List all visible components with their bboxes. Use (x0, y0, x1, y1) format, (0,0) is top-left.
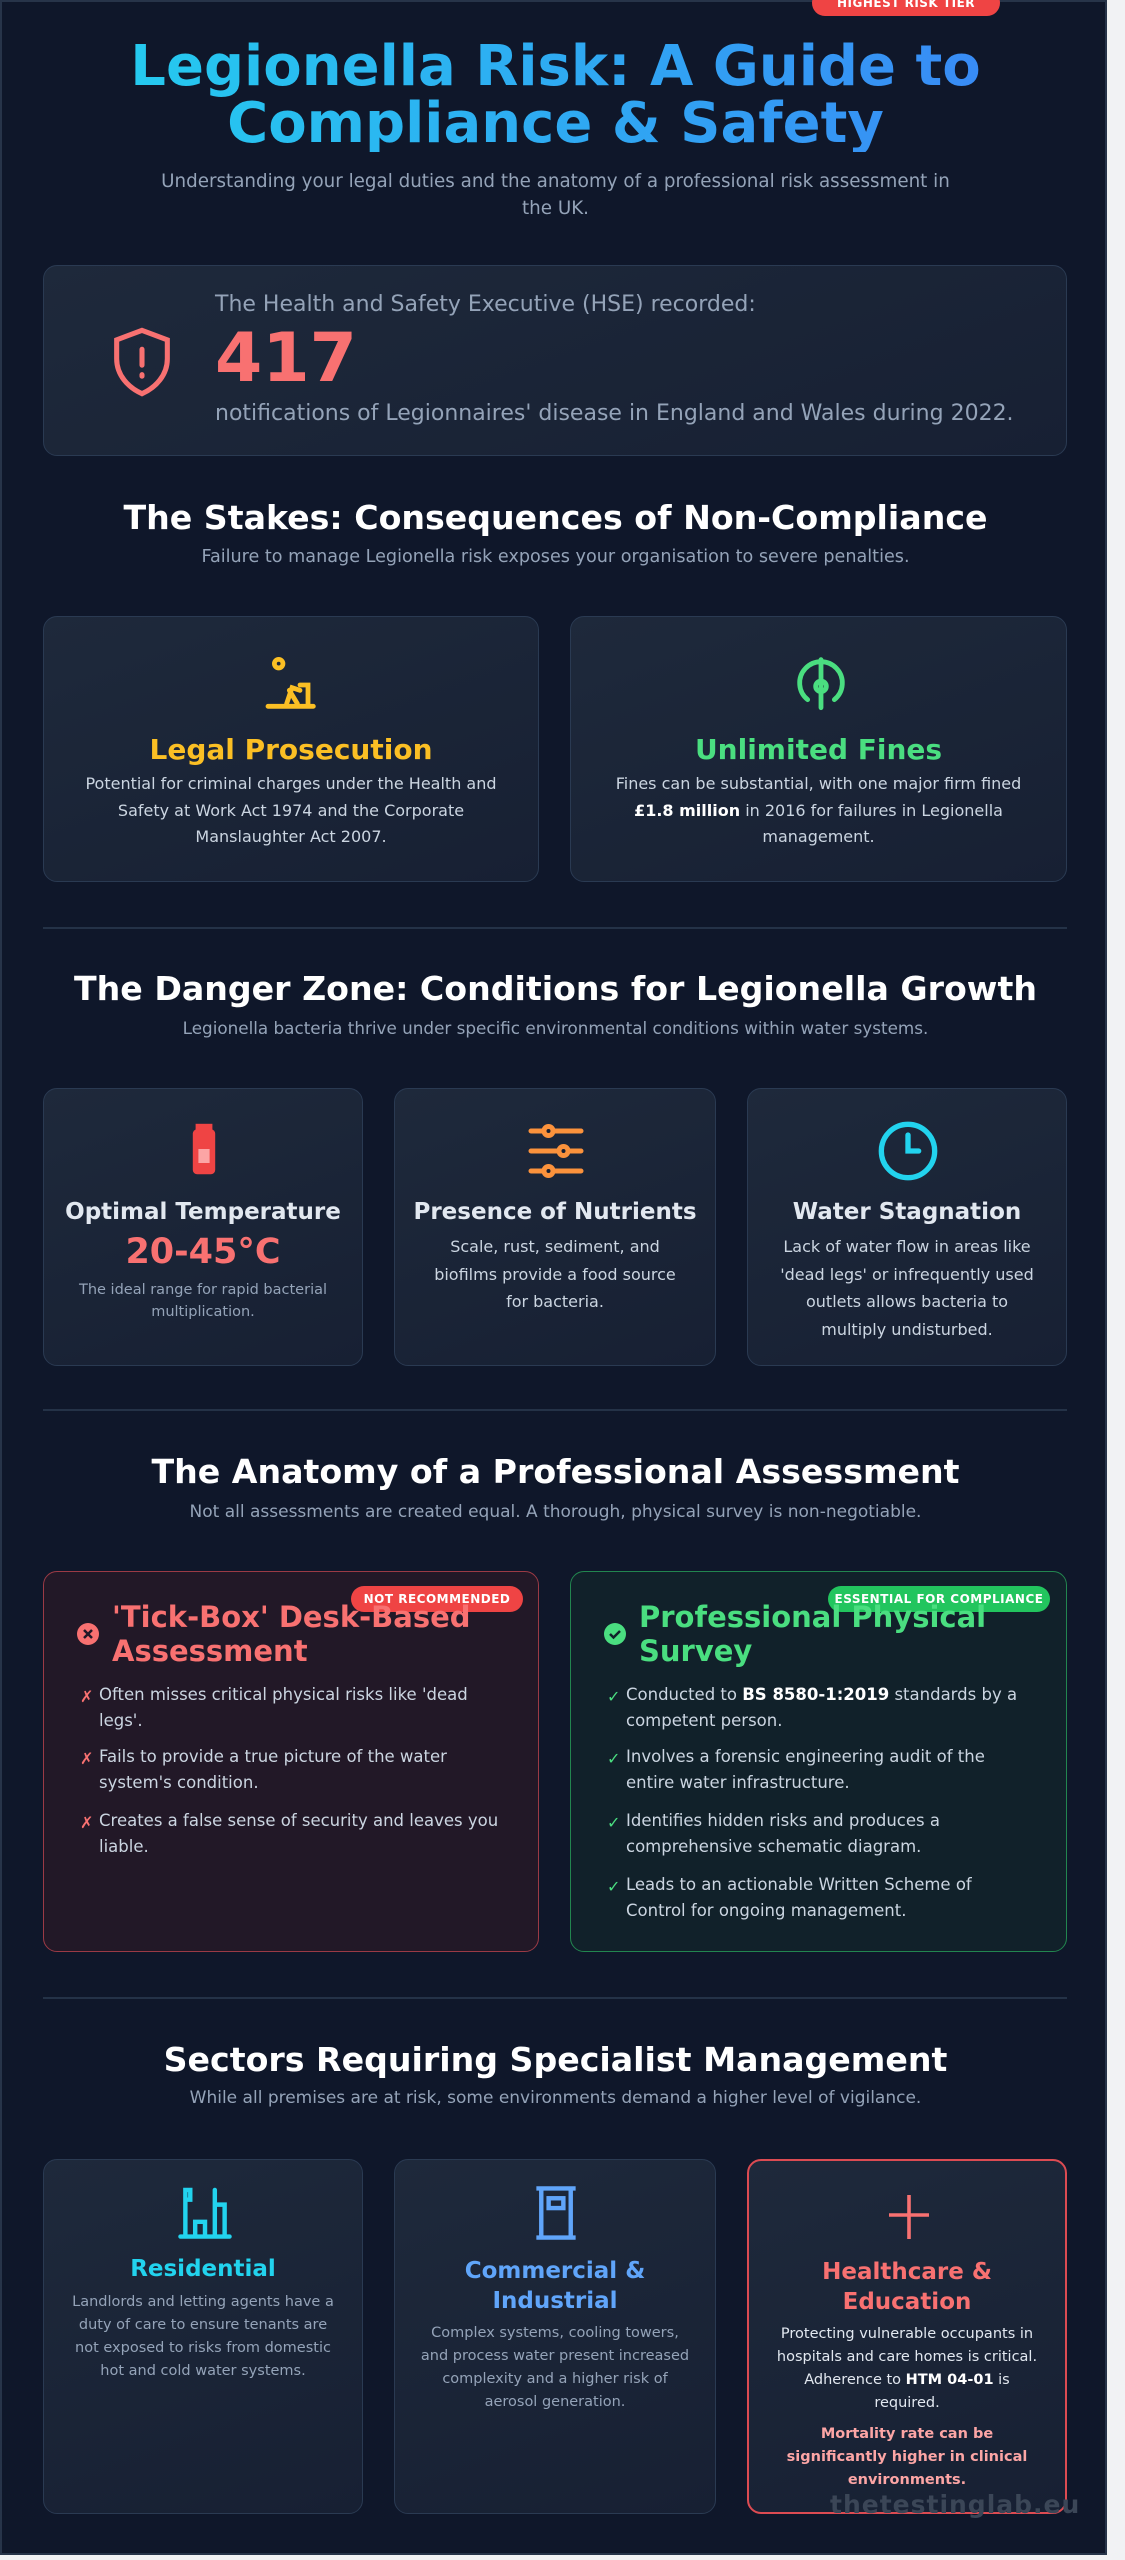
icon: thermometer (192, 1124, 216, 1174)
panel: legal prosecution: Potential for criminal charges under the Health and Safety at Work Act 1974 and the Corporate Manslaughter Act 2007. (85, 774, 497, 846)
panel: healthcare (747, 2159, 1067, 2514)
panel: tick-box: 'Tick-Box' Desk-Based (112, 1600, 471, 1634)
panel: professional survey: ✓ (607, 1687, 620, 1706)
panel: commercial: Complex systems, cooling towers, and process water present increased complexity and a higher risk of aerosol generation. (421, 2325, 689, 2410)
panel: tick-box: ✗ (80, 1749, 93, 1768)
icon: building (536, 2186, 576, 2240)
icon: gavel (266, 657, 316, 709)
heading: anatomy: The Anatomy of a Professional Assessment (151, 1452, 960, 1491)
icon: x circle (77, 1623, 99, 1645)
heading: stakes: The Stakes: Consequences of Non-Compliance (123, 498, 988, 537)
icon: clock (878, 1122, 938, 1180)
panel: temperature: 20-45°C (125, 1232, 281, 1272)
panel: unlimited fines (570, 616, 1067, 882)
badge: highest risk tier (812, 0, 1000, 16)
panel: commercial: Commercial & (465, 2258, 645, 2284)
panel: professional survey: ✓ (607, 1749, 620, 1768)
panel: professional survey: Survey (639, 1634, 752, 1668)
title: Compliance & Safety (227, 91, 884, 156)
panel: tick-box: ✗ (80, 1687, 93, 1706)
panel: residential (43, 2159, 363, 2514)
icon: sliders (528, 1124, 584, 1178)
heading: sectors: Sectors Requiring Specialist Management (164, 2040, 947, 2079)
panel: residential: Residential (130, 2256, 276, 2282)
panel: tick-box: Often misses critical physical risks like 'dead legs'. (99, 1685, 468, 1730)
icon: medical cross (889, 2195, 929, 2239)
stat text: notifications of Legionnaires' disease in England and Wales during 2022. (215, 401, 1014, 426)
panel: residential: Landlords and letting agents have a duty of care to ensure tenants are not exposed to risks from domestic hot and cold water systems. (72, 2294, 334, 2379)
text: Failure to manage Legionella risk exposes your organisation to severe penalties. (201, 547, 910, 567)
panel: professional survey: ✓ (607, 1813, 620, 1832)
badge: essential (828, 1586, 1050, 1612)
panel: commercial (394, 2159, 716, 2514)
panel: tick-box: Creates a false sense of security and leaves you liable. (99, 1811, 498, 1856)
text: While all premises are at risk, some environments demand a higher level of vigilance. (190, 2088, 921, 2108)
panel: nutrients: Scale, rust, sediment, and biofilms provide a food source for bacteria. (434, 1237, 676, 1311)
panel: nutrients: Presence of Nutrients (413, 1199, 697, 1225)
stat text: 417 (215, 319, 357, 398)
panel: legal prosecution (43, 616, 539, 882)
panel: stagnation (747, 1088, 1067, 1366)
panel: professional survey: Professional Physical (639, 1600, 986, 1634)
panel: tick-box: Assessment (112, 1634, 308, 1668)
subtitle: Understanding your legal duties and the anatomy of a professional risk assessment in the UK. (161, 171, 950, 219)
panel: tick-box (43, 1571, 539, 1952)
title: Legionella Risk: A Guide to (130, 34, 981, 99)
panel: healthcare: Mortality rate can be significantly higher in clinical environments. (787, 2426, 1027, 2488)
panel: professional survey: Involves a forensic engineering audit of the entire water infrastructure. (626, 1747, 985, 1792)
icon: coin (797, 657, 845, 710)
stat text: The Health and Safety Executive (HSE) recorded: (215, 292, 756, 317)
panel: tick-box: ✗ (80, 1813, 93, 1832)
panel: temperature: The ideal range for rapid bacterial multiplication. (79, 1282, 327, 1320)
panel: professional survey: Leads to an actionable Written Scheme of Control for ongoing management. (626, 1875, 972, 1920)
icon: buildings (178, 2188, 232, 2239)
panel: professional survey: Identifies hidden risks and produces a comprehensive schematic diagram. (626, 1811, 940, 1856)
text: Not all assessments are created equal. A thorough, physical survey is non-negotiable. (190, 1502, 921, 1522)
panel: tick-box: Fails to provide a true picture of the water system's condition. (99, 1747, 447, 1792)
panel: professional survey: Conducted to BS 8580-1:2019 standards by a competent person. (626, 1685, 1017, 1730)
badge: not recommended: NOT RECOMMENDED (364, 1592, 510, 1606)
panel: stagnation: Water Stagnation (793, 1199, 1021, 1225)
heading: danger zone: The Danger Zone: Conditions for Legionella Growth (74, 969, 1037, 1008)
panel: legal prosecution: Legal Prosecution (149, 733, 433, 766)
panel: healthcare: Protecting vulnerable occupants in hospitals and care homes is critical. Adherence to HTM 04-01 is required. (777, 2326, 1037, 2411)
panel: stagnation: Lack of water flow in areas like 'dead legs' or infrequently used outlets allows bacteria to multiply undisturbed. (780, 1237, 1034, 1338)
panel: professional survey (570, 1571, 1067, 1952)
icon: shield (114, 328, 170, 396)
panel: temperature: Optimal Temperature (65, 1199, 341, 1225)
icon: check circle (604, 1623, 626, 1645)
badge: essential: ESSENTIAL FOR COMPLIANCE (835, 1592, 1043, 1606)
title (2, 38, 1109, 152)
panel: healthcare: Education (843, 2289, 971, 2315)
panel: nutrients (394, 1088, 716, 1366)
panel: healthcare: Healthcare & (822, 2259, 992, 2285)
panel: unlimited fines: Fines can be substantial, with one major firm fined £1.8 million in 2016 for failures in Legionella management. (616, 774, 1021, 846)
panel: temperature (43, 1088, 363, 1366)
text: Legionella bacteria thrive under specific environmental conditions within water systems. (183, 1018, 928, 1038)
stat panel (43, 265, 1067, 456)
stat text (214, 292, 1014, 426)
panel: professional survey: ✓ (607, 1877, 620, 1896)
badge: not recommended (351, 1586, 523, 1612)
watermark: thetestinglab.eu (830, 2490, 1080, 2519)
panel: commercial: Industrial (492, 2288, 618, 2314)
panel: unlimited fines: Unlimited Fines (695, 733, 942, 766)
